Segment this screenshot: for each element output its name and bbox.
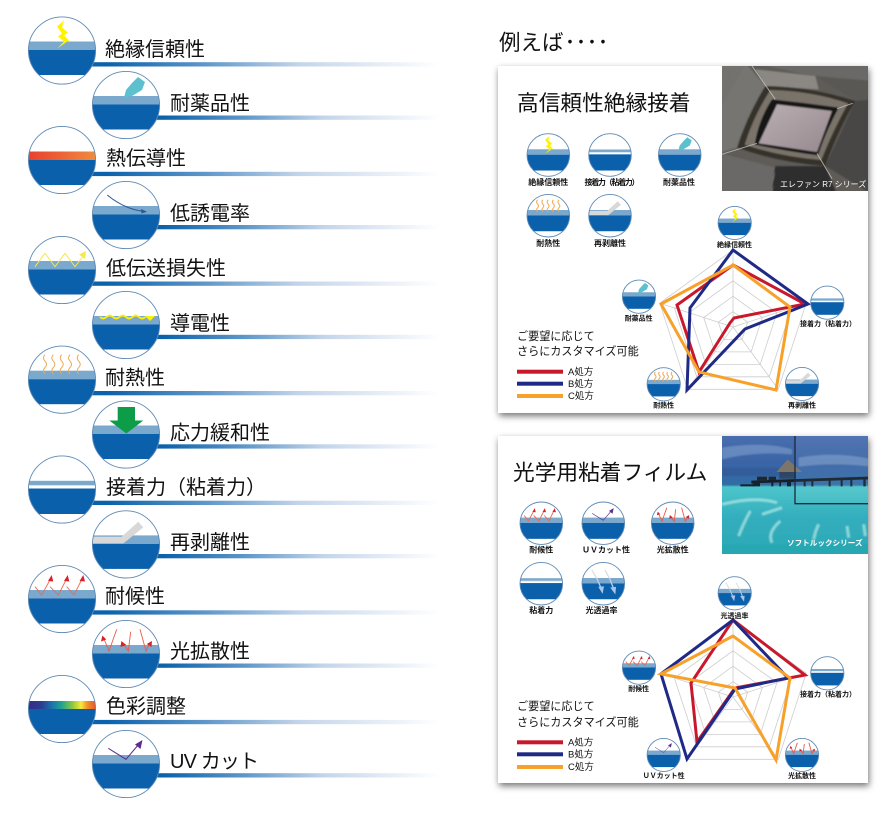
icon: adhesion: 粘着力 (529, 605, 553, 615)
radar axis: adhesion: 接着力（粘着力） (800, 690, 856, 698)
property: color adjustment: 色彩調整 (106, 695, 186, 718)
property: conductivity: 導電性 (170, 312, 230, 335)
radar axis: chemical resistance (622, 280, 656, 322)
property: adhesion (28, 456, 266, 523)
radar axis: adhesion (800, 286, 856, 328)
radar axis: insulation reliability: 絶縁信頼性 (717, 240, 752, 249)
icon: chemical resistance (658, 134, 701, 187)
property: stress relaxation: 応力緩和性 (170, 422, 270, 444)
property: color adjustment (28, 675, 186, 743)
radar axis: removability (785, 367, 819, 410)
legend: A処方 (568, 736, 593, 748)
radar axis: weather resistance: 耐候性 (628, 684, 649, 693)
radar axis: adhesion (800, 657, 856, 698)
property: UV cut: UV カット (170, 751, 259, 773)
radar chart (660, 250, 808, 390)
panel title: 高信頼性絶縁接着 (517, 90, 691, 116)
property: UV cut (92, 730, 259, 798)
panel: high reliability insulating adhesive (498, 63, 872, 413)
property: thermal conductivity: 熱伝導性 (106, 147, 186, 170)
icon: transmittance: 光透過率 (586, 605, 618, 615)
panel: optical adhesive film (498, 433, 872, 783)
photo: semiconductor chip (719, 63, 872, 194)
legend: B処方 (568, 378, 593, 390)
legend: A処方 (568, 366, 593, 378)
radar axis: transmittance: 光透過率 (720, 611, 748, 620)
radar axis: UV cut: ＵＶカット性 (643, 771, 685, 780)
radar axis: light diffusion: 光拡散性 (788, 771, 816, 780)
gradient lines for property list (62, 62, 440, 777)
property: heat resistance (28, 346, 165, 413)
property: weather resistance (28, 565, 165, 633)
heading: for example: 例えば････ (499, 30, 609, 55)
icon: UV cut: ＵＶカット性 (582, 544, 630, 554)
icon: chemical resistance: 耐薬品性 (663, 177, 695, 187)
photo caption: ソフトルックシリーズ (787, 538, 863, 548)
icon: removability (588, 194, 632, 248)
icon: light diffusion (651, 502, 694, 554)
panel title: 光学用粘着フィルム (513, 460, 707, 485)
property: conductivity (92, 291, 230, 359)
property: removability: 再剥離性 (170, 531, 250, 554)
icon: insulation reliability (527, 134, 570, 187)
customization note (517, 329, 639, 358)
icon: insulation reliability: 絶縁信頼性 (528, 177, 568, 187)
customization note (517, 699, 639, 729)
radar axis: chemical resistance: 耐薬品性 (625, 314, 653, 322)
photo: resort sea (719, 433, 872, 557)
icon: UV cut (582, 502, 630, 554)
customization note: さらにカスタマイズ可能 (517, 715, 639, 729)
icon: removability: 再剥離性 (594, 238, 626, 248)
property: weather resistance: 耐候性 (105, 585, 165, 608)
customization note: ご要望に応じて (517, 699, 595, 713)
property: low dielectric constant (92, 181, 250, 249)
icon: transmittance (582, 562, 625, 615)
property: thermal conductivity (28, 126, 186, 194)
icon: light diffusion: 光拡散性 (657, 544, 689, 554)
legend: C処方 (568, 761, 594, 773)
icon: heat resistance: 耐熱性 (536, 238, 560, 248)
icon: adhesion: 接着力（粘着力） (584, 177, 640, 187)
photo caption: エレファン R7 シリーズ (780, 179, 866, 189)
radar axis: UV cut (643, 738, 685, 780)
legend (517, 736, 594, 773)
property: low transmission loss: 低伝送損失性 (106, 257, 226, 280)
icon: adhesion (584, 134, 640, 187)
icon: heat resistance (527, 194, 570, 248)
property: insulation reliability (28, 17, 205, 84)
radar axis: removability: 再剥離性 (788, 400, 816, 410)
radar axis: heat resistance: 耐熱性 (653, 400, 674, 410)
property: light diffusion: 光拡散性 (170, 640, 250, 663)
property: low transmission loss (28, 236, 226, 304)
radar axis: light diffusion (785, 738, 819, 780)
radar axis: transmittance (718, 577, 751, 620)
radar axis: insulation reliability (717, 206, 752, 249)
property: low dielectric constant: 低誘電率 (170, 202, 250, 225)
radar chart (660, 620, 806, 760)
property: chemical resistance (92, 71, 250, 139)
radar axis: adhesion: 接着力（粘着力） (800, 319, 856, 328)
customization note: さらにカスタマイズ可能 (517, 344, 639, 358)
radar axis: heat resistance (647, 368, 680, 410)
icon: adhesion (520, 562, 563, 615)
customization note: ご要望に応じて (517, 329, 595, 343)
property: heat resistance: 耐熱性 (105, 366, 165, 390)
property: light diffusion (92, 620, 250, 688)
property: chemical resistance: 耐薬品性 (170, 92, 250, 115)
icon: weather resistance (520, 502, 563, 554)
icon: weather resistance: 耐候性 (529, 544, 553, 554)
legend (517, 366, 594, 402)
property: stress relaxation (92, 401, 270, 468)
legend: B処方 (568, 748, 593, 760)
property: adhesion: 接着力（粘着力） (106, 476, 266, 499)
radar axis: weather resistance (622, 651, 656, 693)
legend: C処方 (568, 390, 594, 402)
property: insulation reliability: 絶縁信頼性 (105, 38, 205, 61)
property: removability (92, 511, 250, 578)
